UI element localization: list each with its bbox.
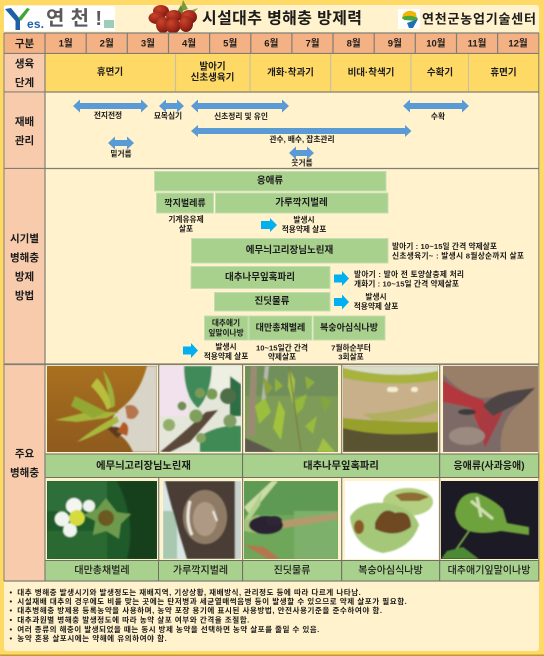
arrow: 관수, 배수, 잡초관리 — [191, 125, 412, 144]
header row: months: 2월 — [100, 38, 114, 50]
arrow: 전지전정: 전지전정 — [94, 110, 122, 120]
arrow: 밑거름 — [108, 136, 134, 158]
bar: 복숭아심식나방: 복숭아심식나방 — [320, 322, 379, 332]
header row: months: 구분 — [15, 38, 34, 50]
labels: pest names row 2 — [45, 560, 539, 581]
arrow with note: 진딧물류 — [334, 292, 398, 311]
note: 기계유유제 살포 — [168, 214, 204, 234]
row: pest control methods by period: 방제 — [15, 270, 34, 283]
notes: • — [10, 634, 12, 643]
row: growth stages: 휴면기 — [97, 66, 123, 78]
notes: • — [10, 597, 12, 606]
notes — [10, 587, 407, 643]
header row: months: 9월 — [388, 38, 402, 50]
note: 에무늬고리장님노린재: 신초생육기~ : 발생시 8월상순까지 살포 — [392, 250, 524, 260]
labels: pest names row 2: 가루깍지벌레 — [173, 564, 228, 576]
bar: 대만총채벌레 — [249, 316, 312, 340]
notes: 농약 혼용 살포시에는 약해에 유의하여야 함. — [17, 633, 167, 643]
row: cultivation management: 재배 — [15, 115, 34, 128]
photo: 대만총채벌레 flower — [47, 481, 157, 559]
row: pest control methods by period: 병해충 — [10, 251, 39, 264]
arrow: 묘목심기: 묘목심기 — [154, 110, 182, 120]
bar: 응애류 — [154, 172, 386, 191]
bar: 진딧물류: 진딧물류 — [255, 296, 290, 307]
row: growth stages: 신초생육기 — [191, 72, 234, 84]
logo: 연천군농업기술센터 — [398, 9, 536, 29]
notes: 대추과원별 병해충 발생정도에 따라 농약 살포 여부와 간격을 조절함. — [17, 614, 249, 624]
arrow with note: 대추애기잎말이나방 — [183, 342, 248, 361]
bar: 복숭아심식나방 — [314, 316, 385, 340]
row: growth stages: 비대·착색기 — [348, 66, 394, 78]
row: growth stages: 발아기 — [199, 60, 226, 72]
arrow with note: 가루깍지벌레 — [261, 214, 326, 234]
arrow with note: 대추애기잎말이나방: 적용약제 살포 — [204, 351, 248, 361]
labels: pest names row 1: 에무늬고리장님노린재 — [96, 459, 191, 472]
logo: Yes 연천 — [4, 6, 115, 31]
row: growth stages: 휴면기 — [490, 66, 517, 78]
bar: 대추나무잎혹파리 — [191, 266, 330, 288]
row: pest control methods by period — [4, 168, 539, 364]
labels: pest names row 1: 응애류(사과응애) — [453, 459, 525, 472]
note: 대만총채벌레: 약제살포 — [268, 352, 296, 362]
arrow with note: 진딧물류: 발생시 — [365, 292, 387, 302]
notes: • — [10, 616, 12, 624]
bar: 대추애기잎말이나방: 잎말이나방 — [208, 328, 244, 338]
note: 대만총채벌레 — [256, 342, 308, 362]
header row: months: 4월 — [182, 38, 196, 50]
row: growth stages — [4, 54, 539, 92]
arrow: 수확 — [403, 100, 469, 121]
arrow: 묘목심기 — [154, 100, 184, 120]
icon: jujube fruits — [148, 0, 198, 34]
photo: 대추나무잎혹파리 shoots — [245, 366, 338, 452]
header row: months: 12월 — [508, 38, 528, 50]
photo: 가루깍지벌레 bark — [163, 481, 241, 559]
row: growth stages: 수확기 — [427, 66, 453, 78]
arrow: 관수, 배수, 잡초관리: 관수, 배수, 잡초관리 — [269, 134, 335, 144]
labels: pest names row 2: 대만총채벌레 — [74, 564, 130, 576]
arrow: 웃거름: 웃거름 — [291, 158, 313, 168]
bar: 깍지벌레류 — [156, 193, 214, 213]
title: 시설대추 병해충 방제력 — [202, 10, 362, 28]
note: 복숭아심식나방: 3회살포 — [338, 352, 364, 362]
note: 대만총채벌레: 10~15일간 간격 — [256, 342, 308, 352]
arrow: 웃거름 — [289, 146, 314, 168]
bar: 에무늬고리장님노린재: 에무늬고리장님노린재 — [246, 244, 333, 256]
logo: Yes 연천: es. — [27, 17, 44, 31]
arrow: 밑거름: 밑거름 — [110, 148, 132, 158]
photo: 에무늬고리장님노린재 damage on bud — [47, 366, 157, 452]
photo: 응애류 damage — [443, 366, 538, 452]
note: 복숭아심식나방 — [331, 342, 371, 362]
labels: pest names row 2: 복숭아심식나방 — [358, 564, 423, 576]
row: cultivation management — [4, 92, 539, 168]
note: 복숭아심식나방: 7월하순부터 — [331, 342, 371, 352]
photo: 대추나무잎혹파리 larvae in leaf — [343, 366, 438, 452]
notes: • — [10, 606, 12, 615]
notes: 시설재배 대추의 경우에도 비를 맞는 곳에는 탄저병과 세균열매썩음병 등이 발생할 수 있으므로 약제 살포가 필요함. — [17, 596, 407, 606]
header row: months: 3월 — [141, 38, 155, 50]
header row: months: 6월 — [264, 38, 278, 50]
row: growth stages: 개화·착과기 — [267, 66, 314, 78]
row: growth stages: 생육 — [15, 58, 34, 70]
logo: 연천군농업기술센터: 연천군농업기술센터 — [422, 12, 536, 26]
bar: 대만총채벌레: 대만총채벌레 — [256, 322, 305, 332]
bar: 대추나무잎혹파리: 대추나무잎혹파리 — [225, 271, 295, 283]
notes: • — [10, 625, 12, 634]
header row: months: 8월 — [347, 38, 361, 50]
note: 기계유유제 살포: 살포 — [179, 224, 193, 234]
arrow with note: 가루깍지벌레: 발생시 — [293, 214, 315, 224]
labels: pest names row 2: 진딧물류 — [274, 564, 310, 576]
bar: 응애류: 응애류 — [257, 176, 283, 186]
row: major pests with photos — [4, 364, 539, 581]
arrow with note: 대추나무잎혹파리: 개화기 : 10~15일 간격 약제살포 — [354, 278, 459, 288]
photo: 복숭아심식나방 fruit damage — [345, 481, 438, 559]
arrow with note: 대추애기잎말이나방: 발생시 — [215, 342, 237, 352]
labels: pest names row 1 — [45, 454, 539, 478]
header row: months: 7월 — [305, 38, 320, 50]
arrow: 신초정리 및 유인 — [191, 100, 289, 121]
row: growth stages: 단계 — [15, 76, 34, 89]
photo: 에무늬고리장님노린재 fruit damage — [160, 366, 241, 452]
bar: 에무늬고리장님노린재 — [192, 238, 388, 263]
bar: 대추애기잎말이나방 — [204, 316, 248, 340]
arrow: 전지전정 — [73, 100, 148, 120]
labels: pest names row 2: 대추애기잎말이나방 — [448, 564, 530, 576]
row: pest control methods by period: 방법 — [15, 289, 34, 302]
arrow with note: 대추나무잎혹파리 — [334, 269, 464, 288]
bar: 깍지벌레류: 깍지벌레류 — [164, 197, 206, 208]
note: 기계유유제 살포: 기계유유제 — [168, 214, 204, 224]
photo: 진딧물류 aphids on stem — [244, 481, 338, 559]
arrow with note: 가루깍지벌레: 적용약제 살포 — [282, 224, 326, 234]
arrow: 수확: 수확 — [431, 111, 445, 121]
logo: Yes 연천: 연천! — [46, 7, 102, 30]
row: major pests with photos: 병해충 — [10, 466, 39, 479]
header row: months: 1월 — [59, 38, 73, 50]
header row: months: 10월 — [426, 38, 446, 50]
notes: 대추 병해충 발생시기와 발생정도는 재배지역, 기상상황, 재배방식, 관리정도 등에 따라 다르게 나타남. — [17, 587, 361, 597]
bar: 가루깍지벌레: 가루깍지벌레 — [275, 196, 328, 208]
header row: months: 5월 — [223, 38, 237, 50]
arrow with note: 진딧물류: 적용약제 살포 — [354, 301, 398, 311]
bar: 가루깍지벌레 — [216, 193, 388, 213]
header row: months — [4, 33, 539, 54]
bar: 대추애기잎말이나방: 대추애기 — [212, 318, 240, 328]
notes: 여러 종류의 해충이 발생되었을 때는 동시 방제 농약을 선택하면 농약 살포를 줄일 수 있음. — [17, 624, 319, 634]
note: 에무늬고리장님노린재: 발아기 : 10~15일 간격 약제살포 — [392, 241, 497, 251]
row: cultivation management: 관리 — [15, 134, 34, 147]
notes: 대추병해충 방제용 등록농약을 사용하며, 농약 포장 용기에 표시된 사용방법, 안전사용기준을 준수하여야 함. — [17, 605, 382, 615]
labels: pest names row 1: 대추나무잎혹파리 — [303, 459, 379, 472]
bar: 진딧물류 — [214, 292, 330, 311]
note: 에무늬고리장님노린재 — [392, 241, 524, 260]
row: major pests with photos: 주요 — [15, 448, 34, 460]
notes: • — [10, 588, 12, 597]
arrow with note: 대추나무잎혹파리: 발아기 : 발아 전 토양살충제 처리 — [354, 269, 464, 279]
row: pest control methods by period: 시기별 — [10, 232, 39, 245]
photo: 대추애기잎말이나방 rolled leaf — [441, 481, 538, 559]
header row: months: 11월 — [468, 38, 486, 50]
arrow: 신초정리 및 유인: 신초정리 및 유인 — [214, 111, 268, 121]
